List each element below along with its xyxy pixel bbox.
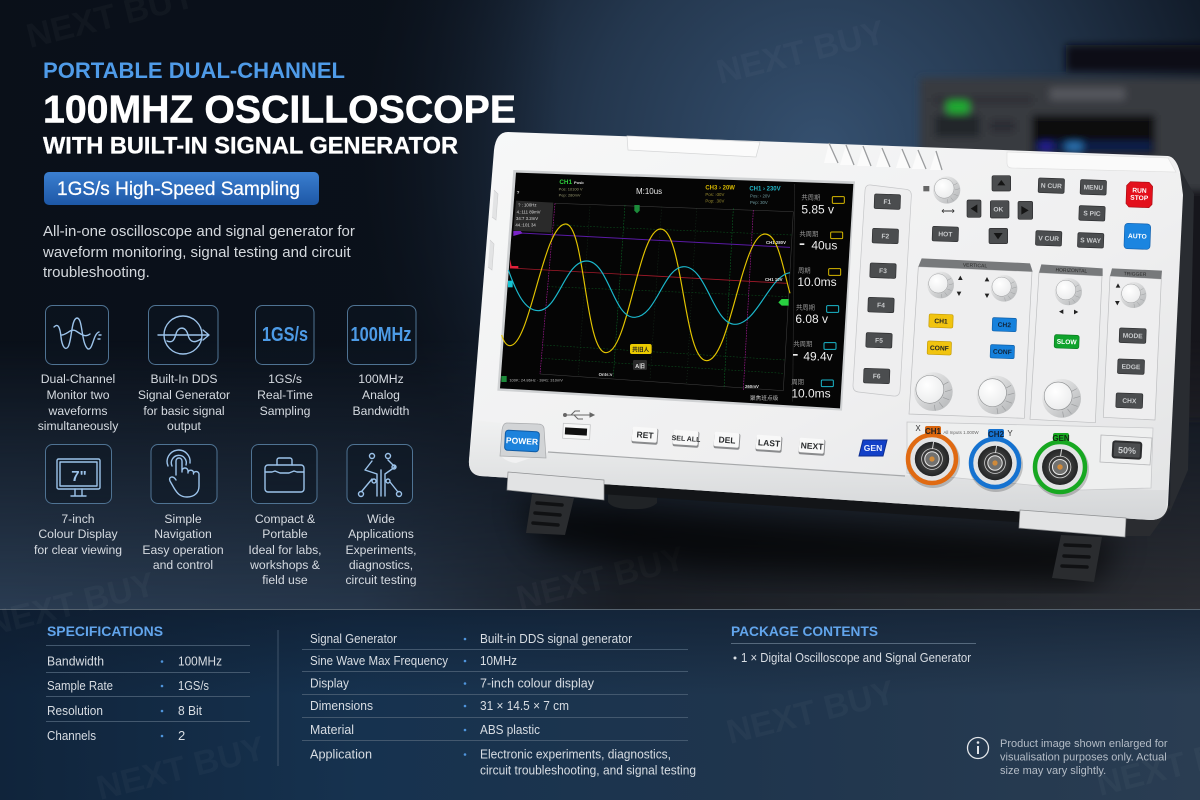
function keys row: DEL bbox=[718, 434, 736, 446]
text: Applications bbox=[348, 527, 414, 541]
markers: CH1 10V bbox=[765, 277, 783, 282]
markers bbox=[501, 205, 789, 402]
bottom panel background bbox=[0, 610, 1200, 800]
power key: POWER bbox=[506, 435, 538, 447]
text: Ideal for labs, bbox=[248, 543, 322, 557]
row: sine max: 10MHz bbox=[480, 653, 517, 668]
measurement column: 周期 bbox=[791, 378, 804, 386]
text: Signal Generator bbox=[138, 388, 230, 402]
markers: CH1 280V bbox=[766, 240, 786, 245]
watermarks: NEXT BUY bbox=[513, 539, 689, 618]
measurement column: 10.0ms bbox=[797, 275, 837, 289]
icon: touch hand bbox=[151, 444, 217, 504]
right stand bbox=[1019, 510, 1126, 582]
top readouts: CH1 › 230V bbox=[749, 187, 781, 193]
text: Product image shown enlarged for bbox=[1000, 738, 1168, 750]
row: bandwidth: Bandwidth bbox=[47, 654, 104, 668]
front lip bbox=[469, 420, 1168, 520]
text: simultaneously bbox=[38, 419, 119, 433]
icon: 100MHz: 100MHz bbox=[350, 324, 412, 346]
markers: A旧 bbox=[635, 363, 645, 370]
top readouts bbox=[517, 179, 781, 205]
F key panel: F5 bbox=[875, 338, 883, 345]
text: Built-In DDS bbox=[150, 372, 218, 386]
heading: SPECIFICATIONS bbox=[47, 623, 163, 639]
left edge notches bbox=[488, 190, 498, 270]
text: output bbox=[167, 419, 202, 433]
trigger section bbox=[1103, 268, 1162, 420]
row: dimensions: Dimensions bbox=[310, 698, 373, 713]
bezel bbox=[497, 170, 855, 411]
row: sample rate: 1GS/s bbox=[178, 678, 209, 693]
background: studio wall bbox=[0, 0, 1200, 610]
trigger section: CHX bbox=[1122, 398, 1137, 405]
auto key: AUTO bbox=[1128, 233, 1147, 241]
text: and control bbox=[153, 558, 213, 572]
measurement column: 5.85 v bbox=[801, 202, 834, 216]
gen key bbox=[859, 440, 887, 456]
vents bbox=[824, 143, 942, 170]
top readouts: Posb bbox=[574, 180, 584, 185]
speed badge bbox=[44, 172, 319, 205]
connector: CH1 bbox=[906, 424, 960, 488]
row: display: Display bbox=[310, 676, 349, 690]
top readouts: Pos: ›30V bbox=[705, 192, 724, 197]
function keys row bbox=[631, 427, 826, 456]
row: sample rate: Sample Rate bbox=[47, 678, 113, 693]
F key panel: F1 bbox=[883, 199, 892, 206]
row: sample rate bbox=[47, 678, 209, 693]
connector: CH2: CH2 bbox=[988, 430, 1005, 439]
left stand bbox=[507, 472, 604, 535]
info box: ? : 100Hz bbox=[518, 203, 537, 208]
function keys row: NEXT bbox=[800, 440, 825, 452]
run stop key bbox=[1126, 182, 1153, 208]
power recess bbox=[500, 423, 546, 458]
trigger section: MODE bbox=[1123, 333, 1143, 340]
navigation keys: N CUR bbox=[1041, 183, 1062, 190]
measurement column: 共周期 bbox=[801, 192, 820, 201]
text: 1GS/s bbox=[268, 372, 302, 386]
info box: 44.:101 34 bbox=[515, 223, 536, 228]
horizontal section: SLOW bbox=[1057, 339, 1077, 346]
markers: 260mV bbox=[745, 384, 759, 389]
F key panel: F4 bbox=[877, 302, 885, 309]
row: application: Electronic experiments, diagnostics, bbox=[480, 746, 671, 762]
row: application: circuit troubleshooting, and signal testing bbox=[480, 762, 696, 778]
info box: 4.:111 89mV bbox=[517, 209, 541, 214]
connector: GEN: GEN bbox=[1052, 434, 1070, 443]
intro paragraph: troubleshooting. bbox=[43, 264, 150, 281]
row: channels: Channels bbox=[47, 728, 96, 743]
package contents bbox=[731, 623, 976, 665]
text: Monitor two bbox=[46, 388, 110, 402]
text: diagnostics, bbox=[349, 558, 413, 572]
usb symbol bbox=[564, 411, 594, 419]
top readouts: Pos: 10100 V bbox=[559, 187, 583, 192]
vertical section: CH1 bbox=[934, 318, 948, 326]
row: signal generator: Built-in DDS signal generator bbox=[480, 631, 633, 646]
measurement column bbox=[791, 184, 844, 402]
text: field use bbox=[262, 573, 308, 587]
product: oscilloscope bbox=[469, 132, 1194, 585]
watermarks: NEXT BUY bbox=[713, 13, 889, 92]
connector: CH2 bbox=[969, 429, 1023, 492]
icon: info bbox=[968, 738, 988, 758]
specifications table bbox=[46, 623, 250, 743]
horizontal section bbox=[1030, 264, 1103, 423]
row: channels bbox=[47, 728, 185, 743]
icon: monitor: 7" bbox=[71, 468, 87, 485]
navigation keys: OK bbox=[993, 207, 1004, 214]
row: resolution: 8 Bit bbox=[178, 703, 202, 718]
row: display: 7-inch colour display bbox=[480, 676, 594, 690]
text: Real-Time bbox=[257, 388, 313, 402]
heading: PACKAGE CONTENTS bbox=[731, 623, 878, 639]
main title: 100MHZ OSCILLOSCOPE bbox=[43, 88, 516, 132]
underside bbox=[600, 478, 1030, 523]
connector: CH2: Y bbox=[1007, 429, 1013, 438]
measurement column: 40us bbox=[811, 238, 837, 252]
grid bbox=[540, 203, 793, 391]
connector: GEN bbox=[1033, 433, 1089, 497]
navigation keys bbox=[923, 176, 1107, 248]
top readouts: CH3 › 20W bbox=[705, 185, 735, 191]
info box: 34:7 3.2mV bbox=[516, 216, 538, 221]
list item: 1 × Digital Oscilloscope and Signal Generator bbox=[741, 651, 971, 665]
F key panel: F6 bbox=[873, 373, 881, 380]
screen bbox=[497, 170, 855, 411]
chassis bbox=[469, 132, 1183, 520]
navigation keys: V CUR bbox=[1038, 235, 1059, 243]
50 percent key bbox=[1113, 441, 1141, 459]
row: sine max: Sine Wave Max Frequency bbox=[310, 653, 448, 668]
navigation keys: ⟷ bbox=[941, 206, 955, 216]
feature: applications bbox=[345, 444, 417, 587]
row: application bbox=[310, 746, 696, 778]
background: blurred bench instruments bbox=[920, 45, 1200, 420]
dark base at right rear bbox=[1122, 505, 1172, 536]
disclaimer note bbox=[968, 738, 1171, 777]
function keys row: RET bbox=[636, 429, 655, 441]
markers: 共旧人 bbox=[632, 345, 649, 353]
navigation keys: MENU bbox=[1083, 184, 1103, 192]
text: 100MHz bbox=[358, 372, 404, 386]
navigation keys: S PIC bbox=[1083, 210, 1101, 218]
text: waveforms bbox=[48, 404, 107, 418]
top readouts: CH1 bbox=[559, 179, 572, 186]
markers: 100K: 24.86Hz · 3841: 310mV bbox=[509, 377, 563, 382]
navigation keys: HOT bbox=[938, 231, 952, 239]
info box bbox=[513, 201, 553, 233]
top readouts: Pep: 30V bbox=[750, 200, 768, 205]
row: channels: 2 bbox=[178, 728, 185, 743]
feature: dual-channel bbox=[38, 306, 119, 433]
text: Compact & bbox=[255, 512, 315, 526]
subtitle: WITH BUILT-IN SIGNAL GENERATOR bbox=[43, 132, 458, 160]
specifications table: continued bbox=[302, 631, 696, 778]
text: Experiments, bbox=[345, 543, 417, 557]
intro paragraph: waveform monitoring, signal testing and circuit bbox=[42, 244, 351, 261]
row: signal generator: Signal Generator bbox=[310, 631, 398, 646]
row: material: ABS plastic bbox=[480, 722, 540, 737]
row: dimensions: 31 × 14.5 × 7 cm bbox=[480, 698, 569, 713]
row: application: Application bbox=[310, 746, 372, 762]
feature: navigation bbox=[142, 444, 224, 572]
row: bandwidth bbox=[47, 654, 222, 668]
gen key: GEN bbox=[864, 443, 882, 453]
measurement column: 共周期 bbox=[799, 229, 818, 238]
rear rubber foot bbox=[608, 494, 657, 509]
feature: sampling bbox=[256, 306, 314, 418]
feature: bandwidth bbox=[348, 306, 416, 418]
text: Simple bbox=[164, 512, 202, 526]
vertical section: CONF bbox=[930, 345, 949, 353]
text: for clear viewing bbox=[34, 543, 122, 557]
F key panel bbox=[853, 185, 911, 396]
vertical section: CONF bbox=[993, 349, 1012, 356]
row: display bbox=[310, 676, 594, 690]
text: Bandwidth bbox=[353, 404, 409, 418]
eyebrow heading: PORTABLE DUAL-CHANNEL bbox=[43, 58, 345, 83]
trigger section: EDGE bbox=[1121, 364, 1141, 371]
row: signal generator bbox=[310, 631, 633, 646]
text: for basic signal bbox=[143, 404, 225, 418]
text: Navigation bbox=[154, 527, 212, 541]
top readouts: ? bbox=[517, 190, 520, 195]
connector section bbox=[907, 422, 1153, 490]
50 percent key: 50% bbox=[1118, 445, 1136, 456]
trigger section: TRIGGER bbox=[1124, 271, 1147, 278]
text: Portable bbox=[262, 527, 308, 541]
measurement column: 10.0ms bbox=[791, 386, 831, 400]
text: visualisation purposes only. Actual bbox=[1000, 752, 1167, 764]
row: material bbox=[310, 722, 540, 737]
text: workshops & bbox=[249, 558, 320, 572]
vertical section: CH2 bbox=[998, 322, 1011, 329]
auto key bbox=[1124, 223, 1151, 249]
control panel bbox=[853, 176, 1162, 423]
text: 7-inch bbox=[61, 512, 95, 526]
function keys row: LAST bbox=[758, 437, 781, 449]
horizontal section: HORIZONTAL bbox=[1055, 267, 1088, 275]
run stop key: STOP bbox=[1130, 195, 1149, 202]
intro paragraph: All-in-one oscilloscope and signal generator for bbox=[43, 223, 355, 240]
measurement column: 49.4v bbox=[803, 350, 833, 364]
text: Sampling bbox=[260, 404, 310, 418]
function keys row: SEL ALL bbox=[671, 435, 701, 444]
text: Dual-Channel bbox=[41, 372, 115, 386]
top readouts: Pep: 280mV bbox=[559, 193, 581, 198]
background: left shade behind copy bbox=[0, 0, 560, 610]
F key panel: F3 bbox=[879, 268, 887, 275]
row: material: Material bbox=[310, 722, 354, 737]
top readouts: Pop: .30V bbox=[705, 199, 724, 204]
text: size may vary slightly. bbox=[1000, 765, 1106, 777]
top readouts: M:10us bbox=[636, 187, 662, 196]
measurement column: 共周期 bbox=[796, 302, 815, 311]
input rating note: All Inputs 1.000W bbox=[943, 430, 979, 435]
icon: 1GS/s: 1GS/s bbox=[262, 324, 308, 346]
icon: waveforms bbox=[46, 306, 108, 364]
connector: CH1: CH1 bbox=[925, 427, 942, 436]
feature: signal generator bbox=[138, 306, 230, 433]
icon: case bbox=[252, 444, 317, 504]
connector: CH1: X bbox=[915, 424, 921, 433]
yellow trace bbox=[502, 224, 790, 361]
watermarks: NEXT BUY bbox=[723, 673, 899, 752]
row: bandwidth: 100MHz bbox=[178, 654, 222, 668]
measurement column: 共周期 bbox=[793, 339, 812, 348]
row: resolution: Resolution bbox=[47, 703, 103, 718]
text: Colour Display bbox=[38, 527, 119, 541]
background: dark table surface bbox=[0, 382, 1200, 609]
icon: circuit bbox=[347, 444, 412, 504]
run stop key: RUN bbox=[1132, 187, 1147, 195]
markers: 聚焦班点级 bbox=[750, 394, 779, 402]
text: Analog bbox=[362, 388, 400, 402]
icon: sine in circle bbox=[148, 306, 218, 364]
vertical section bbox=[909, 258, 1033, 418]
text: Easy operation bbox=[142, 543, 224, 557]
row: resolution bbox=[47, 703, 202, 718]
measurement column: 6.08 v bbox=[795, 312, 828, 326]
reference lines bbox=[513, 233, 790, 247]
speed badge: 1GS/s High-Speed Sampling bbox=[57, 178, 300, 200]
text: circuit testing bbox=[345, 573, 417, 587]
F key panel: F2 bbox=[881, 233, 890, 240]
row: dimensions bbox=[310, 698, 569, 713]
navigation keys: S WAY bbox=[1080, 237, 1102, 245]
text: Wide bbox=[367, 512, 395, 526]
vertical section: VERTICAL bbox=[963, 263, 987, 269]
top ridge bbox=[627, 136, 760, 157]
table shadow bbox=[520, 500, 1120, 585]
feature: portable bbox=[248, 444, 322, 587]
feature: display bbox=[34, 444, 122, 557]
cyan trace bbox=[508, 261, 790, 324]
measurement column: 周期 bbox=[798, 267, 811, 275]
power key bbox=[504, 430, 540, 452]
right side facet bbox=[1170, 158, 1194, 512]
markers: Onts:v bbox=[599, 372, 613, 377]
usb port bbox=[563, 423, 590, 440]
top readouts: Pos: › 20V bbox=[750, 193, 770, 198]
